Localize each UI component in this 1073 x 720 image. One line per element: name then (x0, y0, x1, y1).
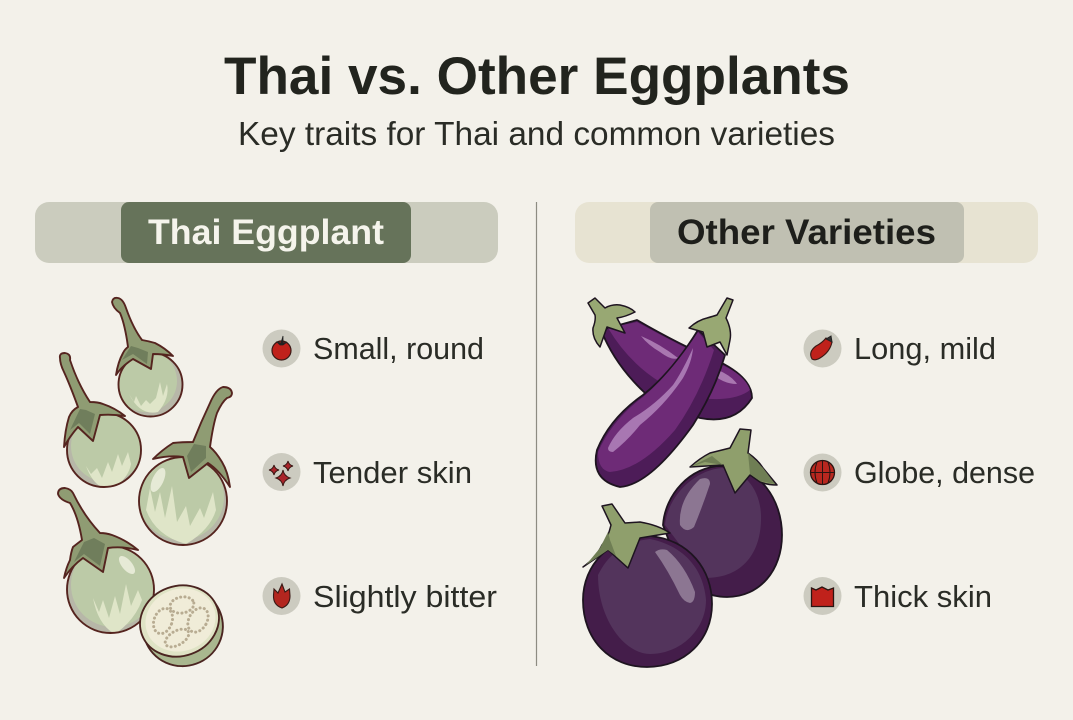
trait: small, round: Small, round (313, 331, 484, 366)
trait: tender skin (262, 453, 472, 491)
eggplant: globe front (583, 504, 712, 667)
heading: Other Varieties: Other Varieties (677, 213, 936, 252)
eggplant: long front (596, 298, 733, 487)
trait: long, mild: Long, mild (854, 331, 996, 366)
eggplant: middle right (138, 387, 232, 545)
trait: thick skin (804, 577, 992, 615)
calyx (689, 298, 733, 355)
panel: Thai eggplant (35, 202, 498, 677)
icon: sparkles (262, 453, 300, 491)
icon: tomato (262, 330, 300, 368)
illustration: Thai eggplants (58, 298, 234, 677)
eggplant: top (112, 298, 182, 416)
trait: globe, dense: Globe, dense (854, 455, 1035, 490)
eggplant: long back (588, 298, 752, 419)
heading: Thai Eggplant: Thai Eggplant (148, 213, 384, 252)
trait: slightly bitter (262, 577, 497, 615)
eggplant: bottom left (58, 488, 155, 634)
subtitle: Key traits for Thai and common varieties (238, 115, 835, 152)
calyx (690, 429, 777, 493)
trait: long, mild (804, 330, 996, 368)
illustration: other eggplants (583, 298, 782, 667)
trait: slightly bitter: Slightly bitter (313, 579, 497, 614)
heading: Other Varieties (575, 202, 1038, 263)
eggplant: middle left (60, 353, 143, 490)
trait: thick skin: Thick skin (854, 579, 992, 614)
icon: globe (804, 454, 842, 492)
icon: skin layer (804, 577, 842, 615)
panel: other varieties (575, 202, 1038, 667)
icon: bitter leaf (262, 577, 300, 615)
calyx (583, 504, 670, 568)
eggplant: cut slice (130, 574, 234, 677)
title: Thai vs. Other Eggplants (224, 47, 850, 106)
infographic (35, 56, 1038, 668)
icon: long eggplant (804, 330, 842, 368)
heading: Thai Eggplant (35, 202, 498, 263)
calyx (588, 298, 635, 347)
eggplant: globe back (663, 429, 782, 597)
trait: tender skin: Tender skin (313, 455, 472, 490)
